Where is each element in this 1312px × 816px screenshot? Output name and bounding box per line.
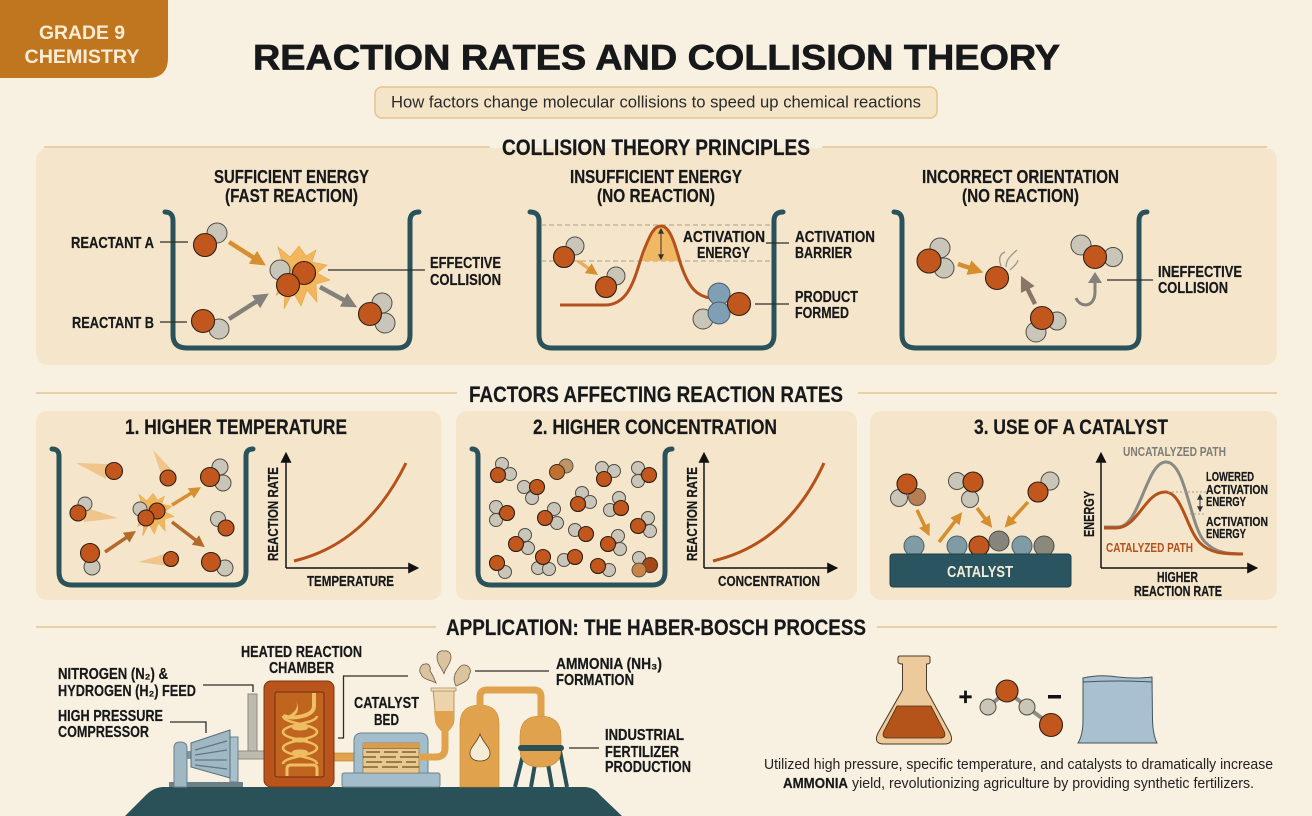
chart: energy profile: ENERGY — [1206, 495, 1246, 509]
label: industrial fertilizer production: INDUSTRIAL — [605, 727, 684, 744]
label: reactant A: REACTANT A — [71, 235, 154, 252]
label: activation barrier: BARRIER — [795, 245, 852, 262]
label: activation energy: ACTIVATION — [683, 229, 765, 246]
label: product formed: FORMED — [795, 305, 849, 322]
activation energy fill — [642, 226, 680, 261]
chart: energy profile: LOWERED — [1206, 470, 1254, 484]
collision burst — [270, 246, 330, 309]
panel: use of a catalyst — [870, 411, 1277, 600]
fast molecules with speed trails — [70, 450, 178, 566]
chart: rate vs temperature — [266, 454, 417, 590]
label: nitrogen and hydrogen feed: NITROGEN (N₂) & — [58, 666, 168, 683]
curved rebound arrow — [1076, 272, 1102, 305]
grade badge: GRADE 9 — [39, 22, 125, 44]
chart: energy profile: UNCATALYZED PATH — [1123, 445, 1226, 459]
scenario: sufficient energy — [71, 167, 501, 348]
chart: energy profile: ACTIVATION — [1206, 483, 1268, 497]
label: heated reaction chamber — [241, 644, 408, 738]
arrow: reactant B to collision — [229, 296, 265, 319]
title: REACTION RATES AND COLLISION THEORY — [253, 38, 1060, 78]
reactant A molecule — [194, 223, 227, 256]
diagram: Haber-Bosch plant — [58, 644, 691, 816]
molecule left — [917, 238, 954, 278]
catalyst slab — [890, 554, 1071, 587]
icon: molecule — [980, 680, 1062, 736]
label: catalyst bed: CATALYST — [354, 695, 419, 712]
product molecule — [358, 293, 395, 333]
arrows — [105, 489, 202, 552]
summary text: yield, revolutionizing agriculture by providing synthetic fertilizers. — [852, 775, 1254, 792]
label: product formed — [755, 289, 858, 322]
label: ineffective collision: COLLISION — [1158, 280, 1228, 297]
heading: factors affecting reaction rates: FACTORS AFFECTING REACTION RATES — [469, 382, 843, 407]
panel: higher concentration: 2. HIGHER CONCENTRATION — [533, 416, 777, 439]
activation arrow — [660, 229, 662, 259]
label: industrial fertilizer production: FERTILIZER — [605, 744, 679, 761]
chart: energy profile: ACTIVATION — [1206, 515, 1268, 529]
arrow: upward — [1023, 280, 1035, 304]
molecules — [80, 459, 234, 576]
fertilizer reactor on stand — [515, 716, 567, 787]
product molecule — [693, 283, 750, 329]
arrow: reactant A to collision — [229, 242, 262, 263]
plus sign: + — [958, 684, 973, 711]
label: activation energy — [683, 229, 765, 262]
outlet pipe and collection vessel — [419, 688, 456, 757]
equation: flask plus molecule gives fertilizer — [876, 656, 1157, 744]
reactant molecules — [890, 472, 1059, 508]
scenario: incorrect orientation: (NO REACTION) — [962, 186, 1079, 206]
scenario: sufficient energy: SUFFICIENT ENERGY — [214, 167, 369, 187]
arrow: incoming — [958, 264, 979, 271]
label: ammonia formation — [475, 656, 662, 689]
label: nitrogen and hydrogen feed: HYDROGEN (H₂) FEED — [58, 683, 196, 700]
heading: application: APPLICATION: THE HABER-BOSCH PROCESS — [446, 615, 866, 640]
subtitle pill — [375, 87, 937, 118]
molecule struck with wisps — [986, 250, 1018, 290]
panel: use of a catalyst: 3. USE OF A CATALYST — [974, 416, 1168, 439]
label: activation barrier — [766, 229, 875, 262]
scenario: incorrect orientation — [894, 167, 1242, 348]
catalyst bed unit — [342, 733, 440, 787]
label: ammonia formation: FORMATION — [556, 672, 634, 689]
chart: energy profile: CATALYZED PATH — [1106, 541, 1193, 555]
chart: rate vs temperature: TEMPERATURE — [307, 574, 394, 590]
base platform — [125, 787, 622, 816]
label: high pressure compressor: COMPRESSOR — [58, 724, 149, 741]
scenario: sufficient energy: (FAST REACTION) — [225, 186, 358, 206]
label: heated reaction chamber: HEATED REACTION — [241, 644, 362, 661]
chart: rate vs concentration — [685, 454, 836, 590]
surface atoms — [904, 531, 1054, 557]
label: catalyst bed: BED — [374, 712, 399, 729]
chart: rate vs concentration: CONCENTRATION — [718, 574, 820, 590]
reactant B molecule — [192, 310, 229, 339]
arrow: products leaving — [320, 287, 353, 305]
label: catalyst bed — [354, 695, 419, 729]
crowded molecules — [490, 458, 658, 578]
label: heated reaction chamber: CHAMBER — [269, 660, 334, 677]
chart: rate vs concentration: REACTION RATE — [685, 467, 701, 561]
panel: higher concentration — [456, 411, 857, 600]
panel: higher temperature — [36, 411, 442, 600]
label: industrial fertilizer production: PRODUCTION — [605, 759, 691, 776]
label: ineffective collision — [1107, 264, 1242, 297]
panel: higher temperature: 1. HIGHER TEMPERATURE — [125, 416, 347, 439]
label: high pressure compressor — [58, 708, 206, 741]
label: product formed: PRODUCT — [795, 289, 858, 306]
minus sign — [1048, 695, 1061, 698]
chart: energy profile: HIGHER — [1157, 570, 1198, 586]
subtitle pill: How factors change molecular collisions to speed up chemical reactions — [391, 92, 921, 112]
label: activation energy: ENERGY — [697, 245, 751, 262]
heading: collision theory principles: COLLISION THEORY PRINCIPLES — [502, 135, 810, 160]
label: reactant B: REACTANT B — [72, 315, 154, 332]
grade badge: CHEMISTRY — [24, 46, 140, 68]
collision burst — [133, 493, 174, 536]
icon: fertilizer bag — [1078, 676, 1157, 743]
ammonia vapour — [420, 651, 470, 686]
label: high pressure compressor: HIGH PRESSURE — [58, 708, 163, 725]
arrows to surface — [917, 502, 1028, 542]
scenario: incorrect orientation: INCORRECT ORIENTATION — [922, 167, 1119, 187]
chart: energy profile: ENERGY — [1206, 527, 1246, 541]
label: effective collision — [328, 255, 501, 289]
molecule top right — [1071, 235, 1122, 268]
catalyst slab: CATALYST — [947, 564, 1013, 581]
icon: flask — [876, 656, 952, 744]
grade badge — [0, 0, 168, 78]
label: effective collision: EFFECTIVE — [430, 255, 501, 272]
molecule bottom — [1026, 306, 1066, 342]
label: activation barrier: ACTIVATION — [795, 229, 875, 246]
arrow: low energy approach — [578, 261, 595, 273]
storage tank — [460, 690, 541, 787]
chart: rate vs temperature: REACTION RATE — [266, 467, 282, 561]
summary text: AMMONIA — [783, 775, 848, 792]
chart: energy profile: ENERGY — [1082, 491, 1098, 537]
label: ammonia formation: AMMONIA (NH₃) — [556, 656, 662, 673]
panel: collision theory principles — [36, 148, 1277, 365]
feed pipes — [236, 694, 264, 759]
label: nitrogen and hydrogen feed — [58, 666, 253, 700]
label: effective collision: COLLISION — [430, 272, 501, 289]
chart: energy profile — [1082, 445, 1268, 600]
molecule bouncing — [596, 267, 625, 298]
scenario: insufficient energy — [530, 167, 875, 348]
gold connecting pipe — [334, 753, 364, 761]
scenario: insufficient energy: INSUFFICIENT ENERGY — [570, 167, 742, 187]
molecule approaching — [554, 237, 584, 268]
summary text: Utilized high pressure, specific temperature, and catalysts to dramatically increase — [764, 756, 1273, 773]
energy curve — [560, 226, 710, 305]
chart: energy profile: REACTION RATE — [1134, 584, 1222, 600]
compressor — [169, 730, 243, 787]
heated reaction chamber — [264, 681, 334, 787]
scenario: insufficient energy: (NO REACTION) — [597, 186, 715, 206]
label: industrial fertilizer production — [569, 727, 691, 776]
summary text — [764, 756, 1273, 792]
label: ineffective collision: INEFFECTIVE — [1158, 264, 1242, 281]
